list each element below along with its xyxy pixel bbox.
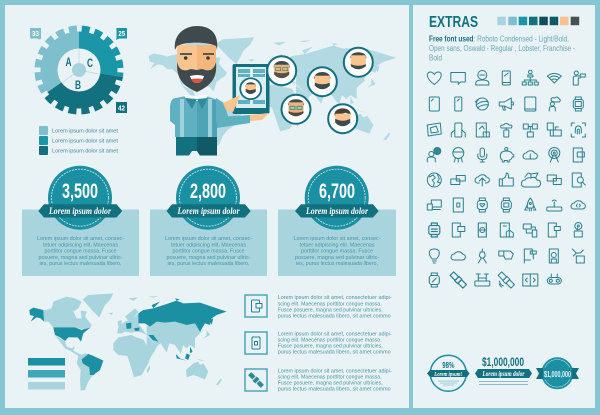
feature row 3: Lorem ipsum dolor sit amet, consectetuer adipi- — [278, 368, 392, 374]
gear donut chart: B — [75, 78, 81, 92]
stat card 2: Lorem ipsum dolor sit amet, consec- — [165, 236, 252, 242]
icon: tablet with magnifier — [572, 173, 585, 187]
icon: smartwatch — [573, 97, 583, 111]
map legend bars — [28, 358, 65, 390]
icon: phone with cloud — [501, 124, 512, 137]
icon: code book — [523, 274, 538, 286]
icon: phone — [502, 71, 510, 85]
icon: tablet with lock — [453, 198, 463, 212]
feature row 1: Fusce posuere, magna sed pulvinar ultricies, — [278, 307, 383, 313]
chart legend: Lorem ipsum dolor sit amet — [52, 128, 118, 134]
avatar 5 — [328, 104, 357, 133]
feature row 1: scing elit. Maecenas porttitor congue massa. — [278, 301, 382, 307]
avatar 4 — [282, 95, 310, 124]
icon: cloud — [451, 252, 466, 260]
hand pointing and holding hand — [216, 95, 269, 122]
avatar 3 — [344, 48, 373, 77]
chart legend: Lorem ipsum dolor sit amet — [52, 138, 118, 144]
lower world map — [29, 293, 227, 391]
icon: person with globe — [476, 70, 489, 85]
feature row 2: Lorem ipsum dolor sit amet, consectetuer adipi- — [278, 331, 392, 337]
icon: cloud code — [571, 201, 586, 209]
icon: microphone — [478, 148, 487, 162]
icon: radio tower — [549, 148, 560, 162]
icon: connected boxes — [523, 124, 537, 137]
font credits: Free font used: Roboto Condensed - Light/Bold, — [429, 34, 569, 44]
feature row 2: purus lectus malesuada libero, sit amet commo — [278, 350, 391, 356]
stat card 2: Lorem ipsum dolor — [177, 207, 240, 217]
icon: heart watch — [477, 198, 487, 212]
badge: 98 percent: Lorem ipsum! — [434, 372, 462, 378]
feature row 3: Fusce posuere, magna sed pulvinar ultricies, — [278, 380, 383, 386]
tablet avatar — [240, 78, 261, 99]
stat card 2: tetuer adipiscing elit. Maecenas — [171, 242, 246, 248]
stat card 2: porttitor congue massa. Fusce — [172, 248, 244, 254]
icon: satellite with signal — [498, 272, 515, 288]
icon: devices — [547, 123, 561, 136]
icon: monitor and devices — [427, 200, 441, 210]
icon: large cloud network — [521, 173, 541, 187]
feature row 2: scing elit. Maecenas porttitor congue massa. — [278, 337, 382, 343]
icon: mobile app — [478, 223, 486, 237]
icon: phone with roller — [524, 249, 536, 263]
icon: chat bubbles — [547, 175, 561, 184]
icon: compass watch — [429, 273, 439, 287]
stat card 2: 2,800 — [190, 180, 226, 203]
icon: phone — [455, 97, 462, 111]
chart legend — [39, 126, 118, 155]
value tag 42 — [116, 102, 127, 113]
badge: one million ribbon — [475, 355, 532, 384]
icon: hand with box — [499, 251, 513, 259]
stat card 1: Lorem ipsum dolor — [48, 207, 111, 217]
icon: tablet and hand — [500, 223, 513, 237]
icon: thumbs up — [499, 173, 513, 186]
stat card 1 — [22, 166, 139, 276]
icon: touch signal — [574, 222, 582, 237]
badge: one million seal: $1,000,000 — [544, 369, 571, 379]
icon: chat bubbles — [451, 176, 465, 184]
feature row 3: purus lectus malesuada libero, sit amet commo — [278, 386, 391, 392]
feature row 1: purus lectus malesuada libero, sit amet commo — [278, 313, 391, 319]
icon: person with sign — [573, 71, 585, 85]
tablet — [232, 64, 270, 114]
icon: tablet touch — [549, 249, 558, 263]
icon: person with cloud — [549, 97, 560, 111]
stat card 2: ies, purus lectus malesuada libero, — [168, 261, 250, 267]
icon: piggy bank — [500, 148, 514, 162]
stat card 3: Lorem ipsum dolor sit amet, consec- — [294, 236, 381, 242]
icon: tablet with tag — [573, 148, 584, 162]
icon: tablet — [429, 97, 439, 111]
icon: heart — [427, 72, 441, 84]
stat card 2 — [150, 166, 267, 276]
icon: tablet and hand — [476, 123, 489, 137]
icon: light bulb — [429, 249, 439, 263]
feature row 1 — [245, 295, 392, 319]
value tag 25 — [116, 28, 127, 40]
icon: speech bubble — [451, 72, 465, 84]
icon: organisation chart — [522, 70, 538, 85]
stat card 1: porttitor congue massa. Fusce — [44, 248, 116, 254]
person with tablet — [170, 26, 250, 156]
feature row 3: scing elit. Maecenas porttitor congue massa. — [278, 374, 382, 380]
avatar 1 — [267, 56, 296, 85]
gear donut chart — [33, 24, 125, 116]
badge: one million ribbon: Lorem ipsum dolor — [482, 370, 525, 378]
badge: one million ribbon: $1,000,000 — [482, 355, 524, 369]
badge: 98 percent: 98% — [442, 360, 455, 370]
icon: claw robot — [478, 249, 486, 263]
icon: hand and box — [572, 249, 584, 263]
stat card 3: Lorem ipsum dolor — [305, 207, 368, 217]
gear donut chart: A — [66, 55, 72, 69]
extras heading: EXTRAS — [429, 14, 478, 31]
feature row 2 — [245, 331, 392, 356]
icon: game controller — [547, 274, 561, 284]
feature row 1: Lorem ipsum dolor sit amet, consectetuer adipi- — [278, 295, 392, 301]
icon: phone in hands — [451, 123, 465, 137]
avatar 2 — [308, 67, 337, 96]
top world map — [149, 37, 397, 146]
body — [170, 96, 250, 137]
trousers — [176, 137, 217, 156]
stat card 1: ies, purus lectus malesuada libero, — [40, 261, 122, 267]
icon: wifi — [547, 74, 561, 83]
badge: 98 percent — [427, 355, 470, 391]
stat card 3: tetuer adipiscing elit. Maecenas — [300, 242, 375, 248]
gear donut chart: C — [87, 56, 93, 70]
icon: fingerprint scan — [571, 123, 585, 137]
stat card 3 — [278, 166, 396, 276]
feature row 2: Fusce posuere, magna sed pulvinar ultricies, — [278, 344, 383, 350]
icon: smartwatch — [501, 198, 511, 212]
icon: person with globe — [427, 148, 441, 162]
colour swatches — [497, 17, 579, 25]
value tag 42: 42 — [118, 104, 125, 112]
stat card 1: Lorem ipsum dolor sit amet, consec- — [37, 236, 124, 242]
icon: map picture — [427, 123, 441, 136]
icon: cloud upload — [475, 175, 490, 186]
chart legend: Lorem ipsum dolor sit amet — [52, 148, 118, 154]
stat card 3: ies, purus lectus malesuada libero, — [296, 261, 378, 267]
stat card 3: posuere, magna sed pulvinar ultric- — [295, 255, 379, 261]
value tag 33: 33 — [32, 29, 39, 38]
value tag 33 — [30, 28, 41, 40]
icon: globe award — [453, 148, 464, 162]
stat card 3: 6,700 — [319, 180, 355, 203]
font credits — [429, 34, 575, 62]
stat card 2: posuere, magna sed pulvinar ultric- — [166, 255, 251, 261]
icon: satellite — [450, 272, 467, 288]
icon: router — [547, 200, 562, 211]
badge: one million seal — [536, 357, 579, 389]
icon: phone with bubble — [548, 223, 560, 237]
icon: megaphone — [499, 98, 513, 110]
stat card 3: porttitor congue massa. Fusce — [301, 248, 373, 254]
value tag 25: 25 — [118, 29, 125, 38]
icon: watch with text — [429, 223, 440, 237]
icon: router — [475, 274, 490, 286]
icon: cloud — [523, 151, 538, 159]
stat card 1: tetuer adipiscing elit. Maecenas — [43, 242, 118, 248]
head — [177, 45, 216, 74]
feature row 3 — [245, 368, 392, 392]
icon: tablet — [525, 97, 536, 111]
icon: bubbles and phone — [523, 224, 537, 237]
icon: rocket — [525, 198, 536, 211]
icon: globe with arrow — [475, 98, 488, 110]
icon: phone with bubble — [452, 223, 465, 237]
stat card 1: posuere, magna sed pulvinar ultric- — [38, 255, 123, 261]
icon: globe — [427, 173, 441, 187]
font credits: Bold — [429, 54, 442, 62]
icon grid — [427, 70, 586, 288]
stat card 1: 3,500 — [62, 180, 98, 203]
